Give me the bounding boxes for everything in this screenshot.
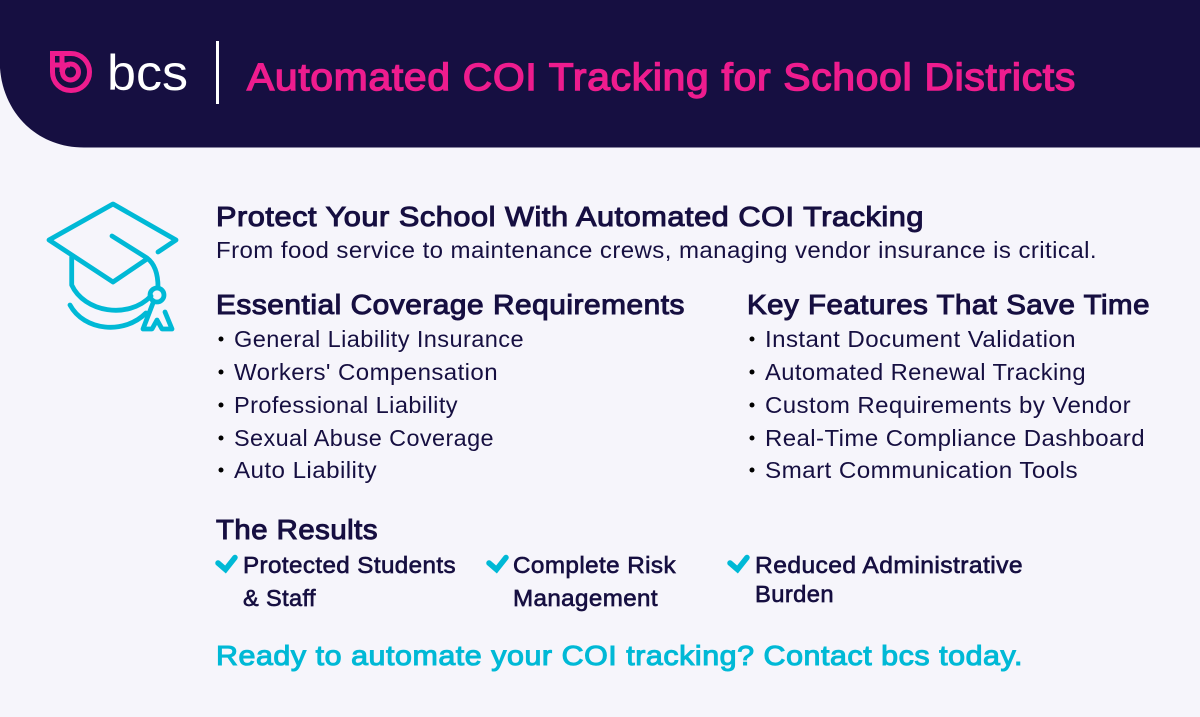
coverage list: Sexual Abuse Coverage — [234, 425, 494, 451]
result: reduced administrative burden: Reduced Administrative — [755, 552, 1023, 578]
icon: check — [489, 558, 506, 570]
features list: Smart Communication Tools — [765, 457, 1078, 483]
icon: graduation cap — [49, 204, 176, 329]
intro text: From food service to maintenance crews, managing vendor insurance is critical. — [216, 237, 1097, 263]
header divider — [216, 41, 219, 104]
coverage list — [218, 326, 524, 483]
features list: Real-Time Compliance Dashboard — [765, 425, 1145, 451]
call to action: Ready to automate your COI tracking? Contact bcs today. — [216, 640, 1023, 671]
result: reduced administrative burden — [730, 552, 1023, 607]
result: reduced administrative burden: Burden — [755, 581, 834, 607]
intro block — [216, 201, 1097, 263]
header band — [0, 0, 1200, 148]
results heading: The Results — [216, 514, 378, 545]
coverage list: Auto Liability — [234, 457, 377, 483]
panel: key features — [747, 289, 1150, 483]
result: complete risk management — [489, 552, 676, 611]
features list: Instant Document Validation — [765, 326, 1076, 352]
result: complete risk management: Management — [513, 585, 658, 611]
features heading: Key Features That Save Time — [747, 289, 1150, 320]
logo: bcs — [52, 45, 188, 101]
coverage list: Workers' Compensation — [234, 359, 498, 385]
result: protected students: & Staff — [243, 585, 316, 611]
header panel — [0, 0, 1200, 148]
logo mark — [52, 54, 90, 90]
result: complete risk management: Complete Risk — [513, 552, 676, 578]
title: Automated COI Tracking for School Districts — [247, 57, 1076, 99]
result: protected students: Protected Students — [243, 552, 456, 578]
panel: essential coverage requirements — [216, 289, 685, 483]
panel: the results — [216, 514, 1023, 611]
icon: check — [730, 558, 747, 570]
features list — [750, 326, 1145, 483]
icon: check — [218, 558, 235, 570]
features list: Custom Requirements by Vendor — [765, 392, 1131, 418]
logo wordmark: bcs — [107, 45, 188, 101]
result: protected students — [218, 552, 456, 611]
coverage list: Professional Liability — [234, 392, 458, 418]
coverage list: General Liability Insurance — [234, 326, 524, 352]
features list: Automated Renewal Tracking — [765, 359, 1086, 385]
coverage heading: Essential Coverage Requirements — [216, 289, 685, 320]
intro heading: Protect Your School With Automated COI Tracking — [216, 201, 924, 232]
